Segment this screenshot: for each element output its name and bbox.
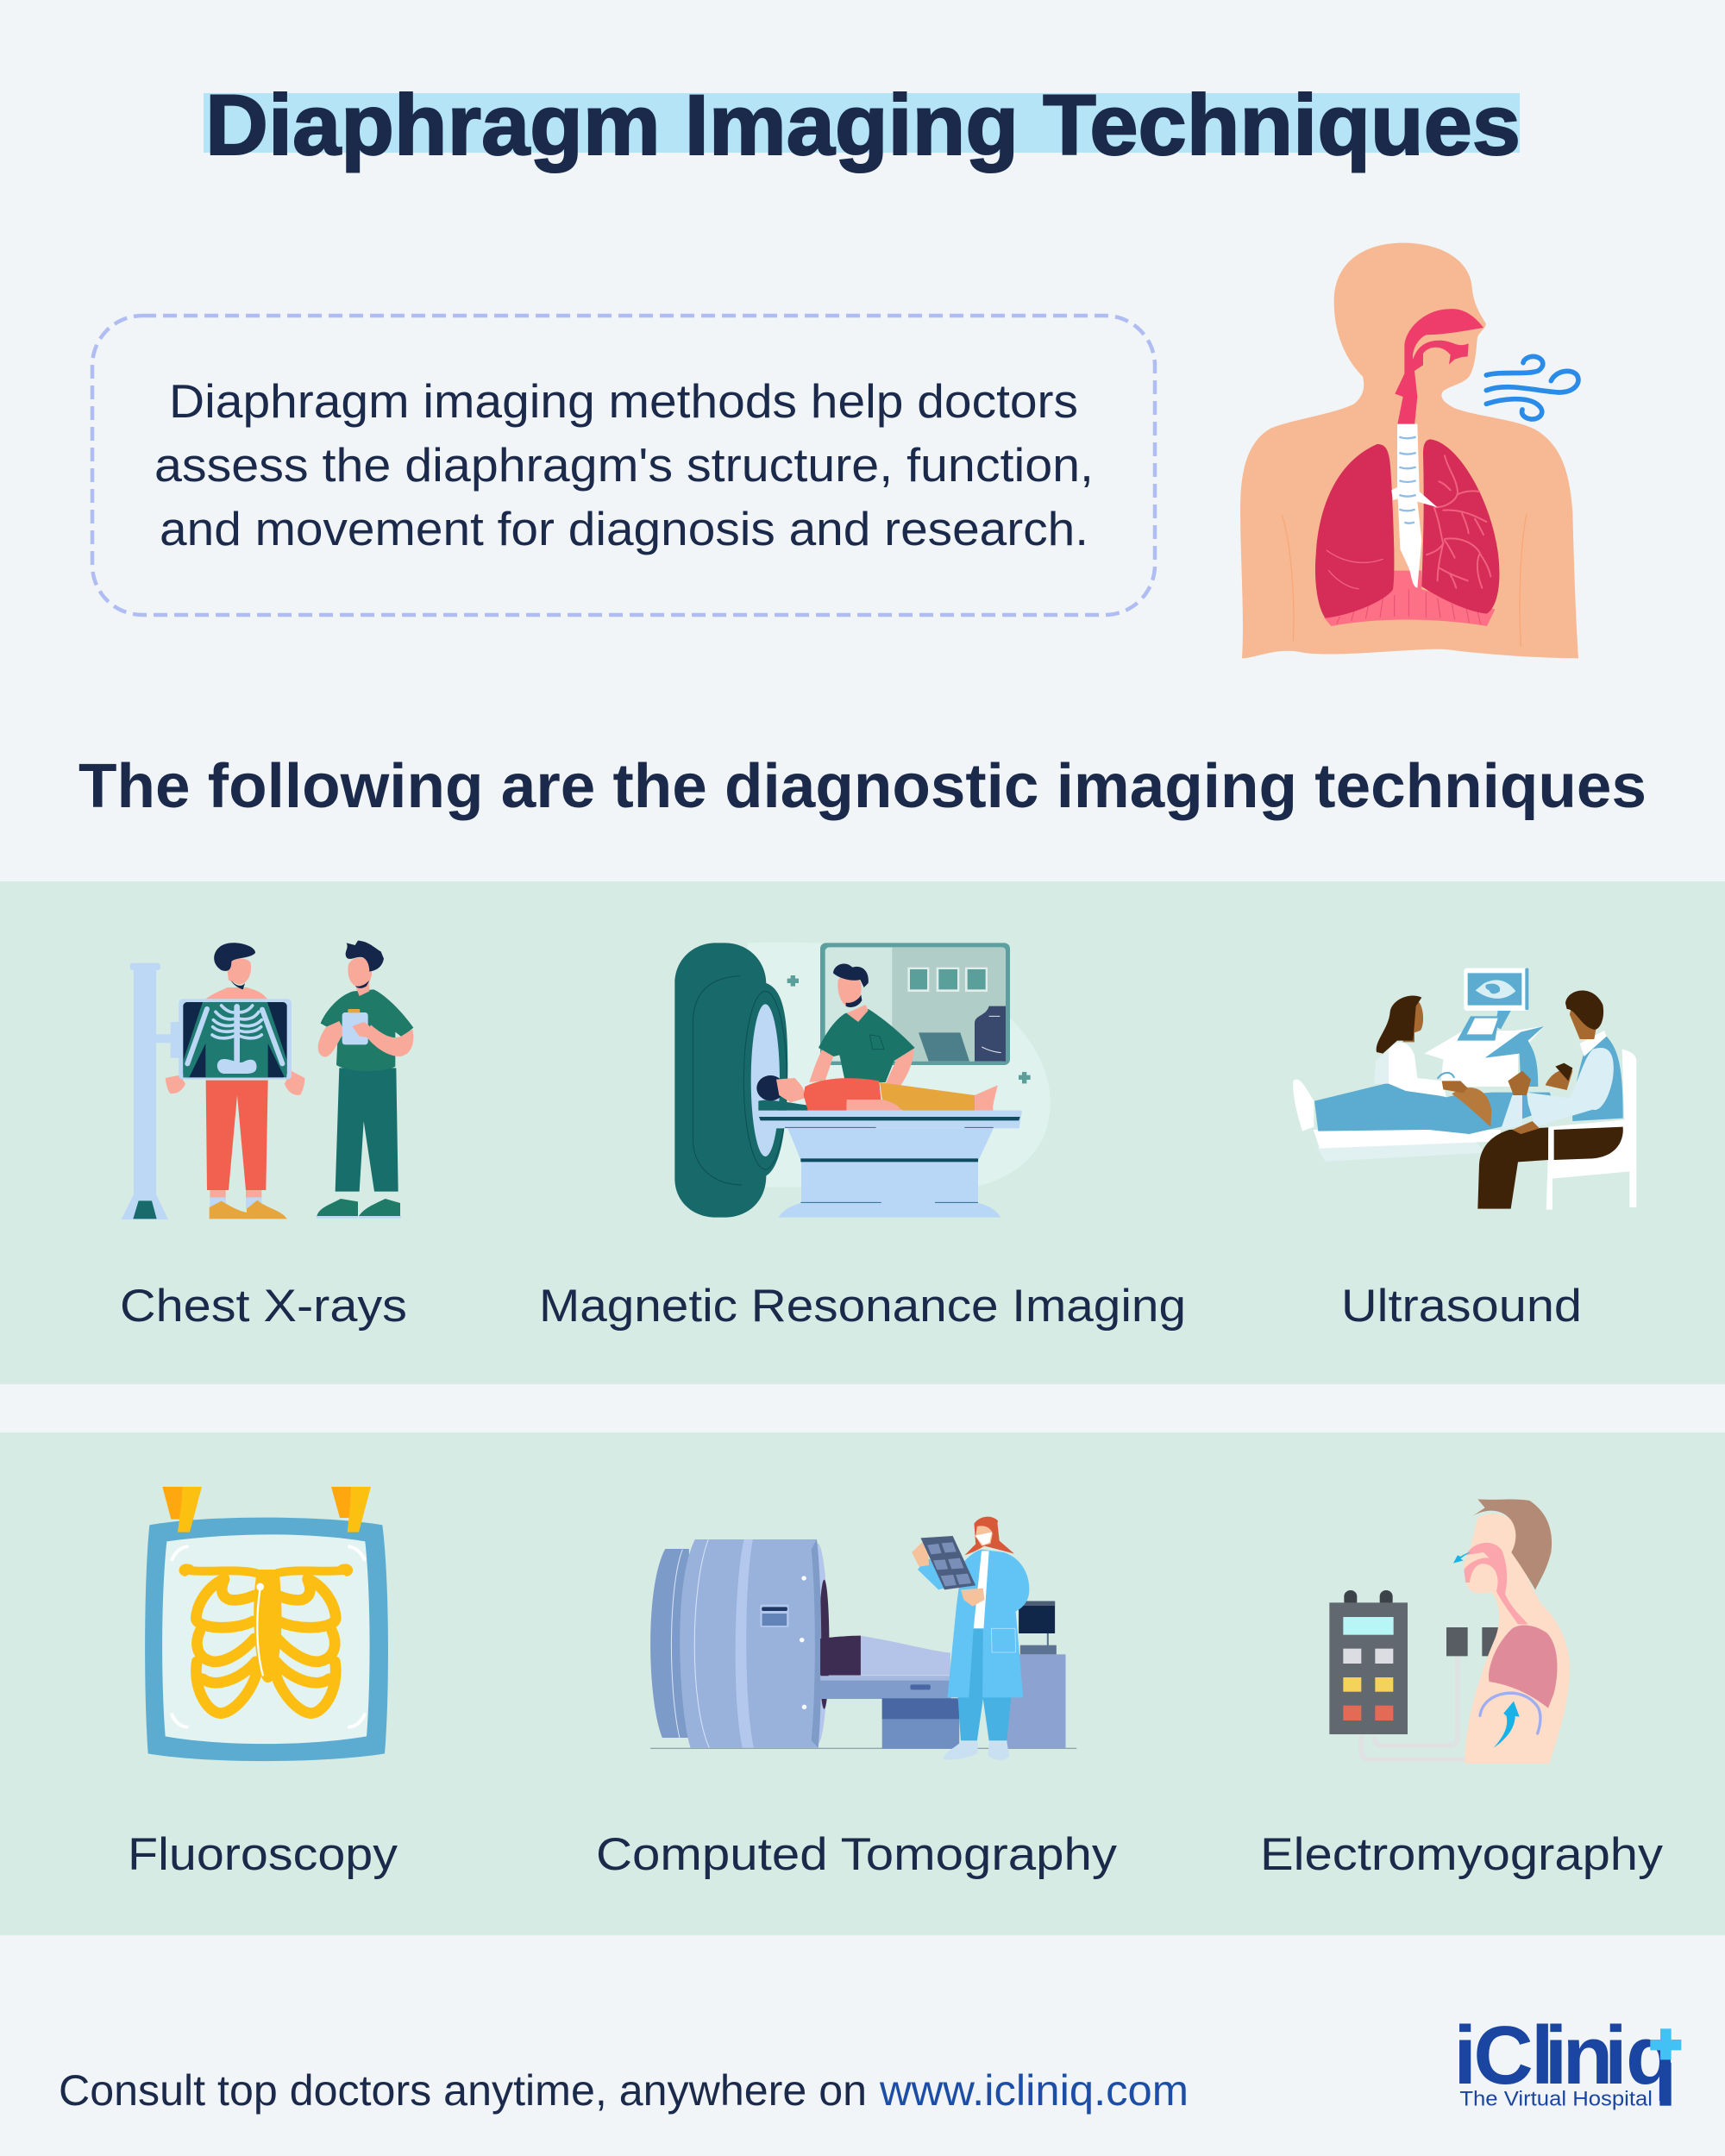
airway	[1395, 309, 1484, 425]
diaphragm muscle fibres	[1337, 589, 1481, 624]
label: fluoroscopy: Fluoroscopy	[128, 1829, 398, 1880]
footer call to action: Consult top doctors anytime, anywhere on	[59, 2066, 867, 2115]
label: magnetic resonance imaging: Magnetic Resonance Imaging	[539, 1281, 1186, 1332]
bed	[1317, 1141, 1486, 1162]
electrodes	[1446, 1627, 1505, 1656]
subheading: The following are the diagnostic imaging techniques	[78, 752, 1647, 821]
console cabinet and monitor	[1007, 1601, 1066, 1748]
floor line	[650, 1748, 1076, 1749]
ultrasound machine	[1425, 968, 1544, 1087]
panel: introduction callout: Diaphragm imaging methods help doctors	[169, 374, 1078, 428]
body silhouette	[1240, 243, 1578, 658]
footer call to action: www.icliniq.com	[879, 2066, 1189, 2115]
label: electromyography: Electromyography	[1260, 1829, 1664, 1880]
illustration: ultrasound	[1293, 968, 1636, 1210]
diaphragm	[1324, 571, 1495, 626]
backdrop blob	[742, 942, 1051, 1188]
patient	[1293, 996, 1555, 1134]
label: chest x-rays: Chest X-rays	[120, 1281, 407, 1332]
illustration: CT scanner	[650, 1517, 1076, 1760]
arrow: exhaled air	[1453, 1551, 1472, 1564]
doctor with clipboard	[317, 941, 413, 1219]
rib cage	[179, 1564, 353, 1714]
radiologist	[912, 1517, 1029, 1760]
logo: iCliniq: The Virtual Hospital	[1459, 2088, 1653, 2111]
panel: introduction callout: and movement for diagnosis and research.	[160, 502, 1088, 555]
clips	[162, 1487, 371, 1532]
breath lines	[1486, 356, 1578, 419]
title: Diaphragm Imaging Techniques	[205, 77, 1521, 172]
airway	[1464, 1543, 1528, 1624]
illustration: MRI scanner	[674, 942, 1051, 1218]
label: computed tomography: Computed Tomography	[596, 1829, 1118, 1880]
hair	[1471, 1499, 1552, 1589]
back creases	[1282, 515, 1527, 647]
diaphragm arc	[1480, 1693, 1540, 1733]
lung	[1489, 1625, 1557, 1708]
label: ultrasound: Ultrasound	[1341, 1281, 1582, 1332]
scanner table	[757, 1111, 1022, 1218]
scanner gantry	[674, 943, 787, 1218]
panel: first techniques band	[0, 881, 1725, 1384]
scanner body	[650, 1539, 829, 1748]
torso and head	[1464, 1514, 1570, 1764]
illustration: electromyography	[1329, 1499, 1570, 1764]
patient lying down	[756, 1075, 998, 1111]
left lung	[1315, 444, 1394, 618]
x-ray panel	[179, 999, 292, 1080]
panel: second techniques band	[0, 1432, 1725, 1935]
chair	[1546, 1050, 1636, 1210]
patient table	[820, 1636, 959, 1749]
trachea	[1391, 424, 1438, 588]
EMG device	[1329, 1590, 1408, 1734]
logo: iCliniq: iCliniq	[1453, 2009, 1677, 2102]
illustration: fluoroscopy chest film	[145, 1487, 388, 1761]
panel: introduction callout	[92, 316, 1155, 615]
control room window	[820, 943, 1010, 1065]
film corner highlights	[172, 1546, 365, 1727]
technician	[809, 963, 915, 1087]
panel: introduction callout: assess the diaphragm's structure, function,	[154, 438, 1094, 492]
arrow: diaphragm movement	[1494, 1702, 1520, 1748]
medical crosses	[787, 975, 1031, 1083]
lung vessels	[1327, 455, 1490, 589]
sonographer	[1477, 990, 1623, 1209]
x-ray stand	[122, 963, 179, 1219]
right lung	[1421, 439, 1499, 614]
patient	[166, 943, 304, 1219]
trachea rings	[1399, 437, 1416, 523]
illustration: chest x-ray	[122, 941, 413, 1219]
wires	[1361, 1656, 1469, 1759]
film frame	[145, 1518, 388, 1761]
illustration: respiratory system torso	[1240, 243, 1578, 658]
